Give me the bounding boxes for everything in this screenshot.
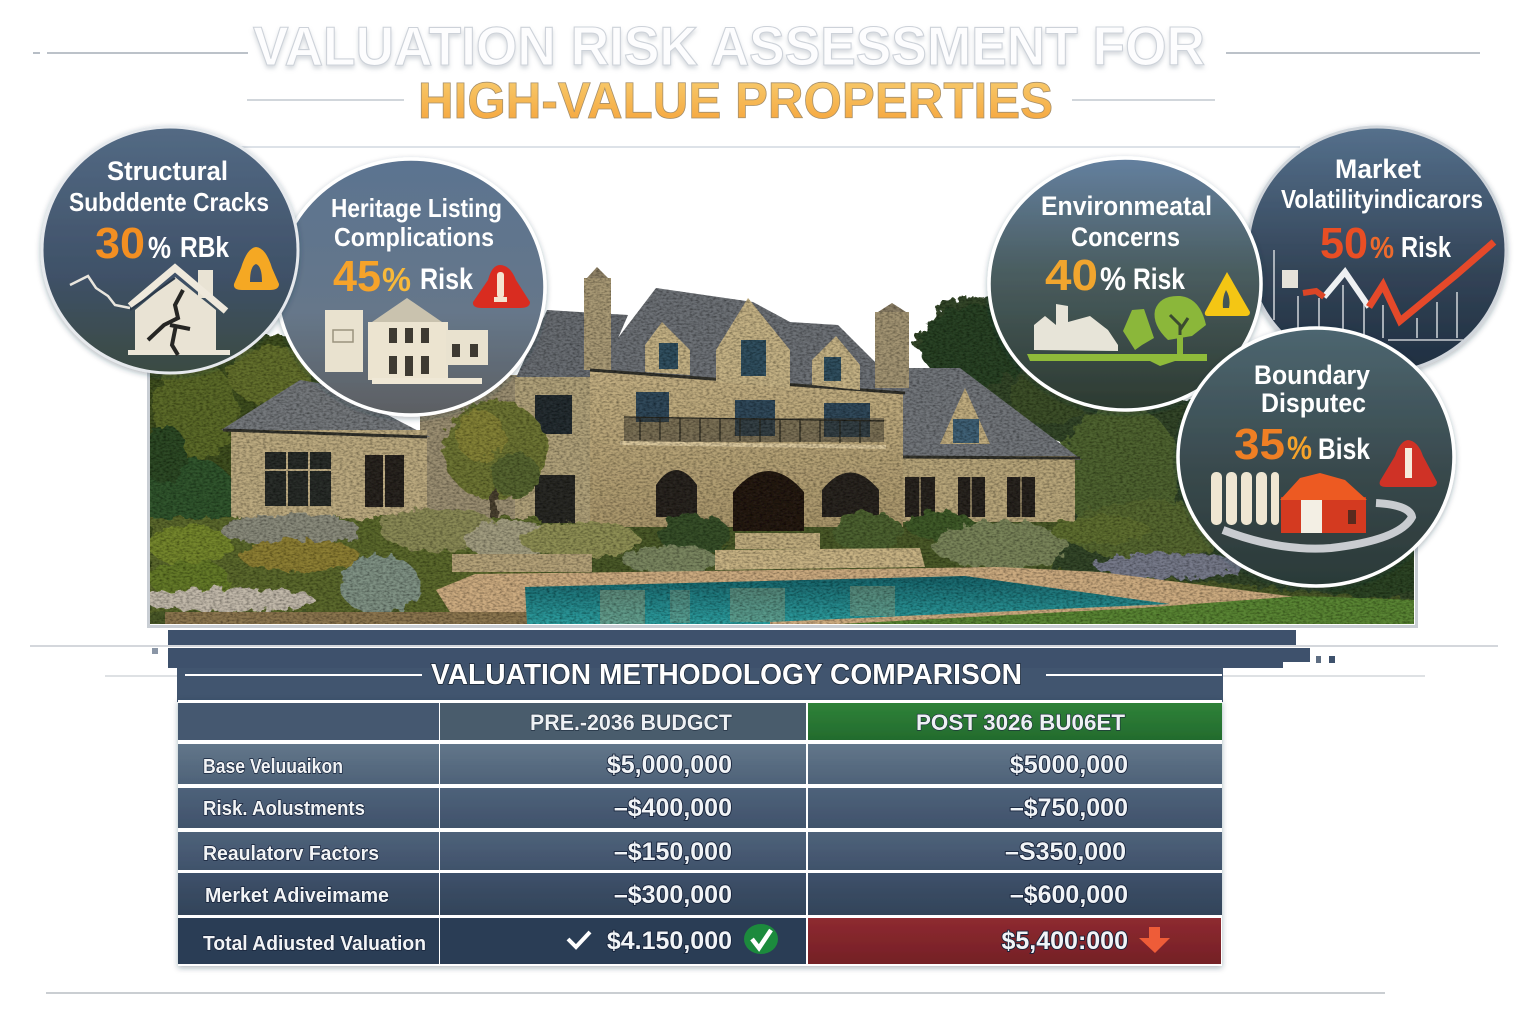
icon: down arrow: [1139, 927, 1170, 953]
row: market adjustment: –$600,000: [1010, 881, 1128, 909]
risk value: Risk: [420, 263, 473, 296]
header row: POST 3026 BU06ET: [916, 710, 1126, 735]
row: base valuation: $5000,000: [1010, 751, 1128, 779]
risk value: Risk: [1401, 232, 1452, 264]
terrace: [436, 567, 1292, 624]
icon: check mark: [568, 932, 590, 947]
garden: [145, 508, 1245, 615]
label: [69, 156, 269, 217]
label: Market: [1335, 154, 1421, 184]
icon: heritage buildings: [325, 298, 488, 384]
row: total adjusted valuation: $4.150,000: [607, 927, 732, 955]
risk value: %: [1100, 261, 1126, 297]
label: Volatilityindicarors: [1281, 184, 1483, 214]
row: risk adjustments: Risk. Aolustments: [203, 798, 365, 820]
badge: heritage listing: [277, 159, 545, 415]
risk value: 40: [1045, 251, 1098, 300]
risk value: [333, 252, 473, 301]
risk value: 45: [333, 252, 381, 301]
table heading: VALUATION METHODOLOGY COMPARISON: [431, 659, 1022, 691]
row: regulatory factors: –$150,000: [614, 838, 732, 866]
main facade: [515, 298, 905, 531]
icon: fence: [1211, 472, 1279, 525]
icon: house and arrow: [1223, 473, 1412, 549]
left wing: [221, 375, 525, 522]
row: base valuation: $5,000,000: [607, 751, 732, 779]
pool: [525, 576, 1170, 624]
risk value: [95, 219, 230, 268]
row: regulatory factors: –S350,000: [1005, 838, 1126, 866]
risk value: Risk: [1133, 263, 1185, 296]
row: base valuation: [178, 744, 1222, 784]
risk value: 30: [95, 219, 145, 268]
row: market adjustment: –$300,000: [614, 881, 732, 909]
label: [1281, 154, 1483, 214]
title line 1: VALUATION RISK ASSESSMENT FOR: [253, 15, 1205, 77]
row: market adjustment: Merket Adiveimame: [205, 885, 389, 907]
right wing: [895, 368, 1082, 522]
header row: [178, 703, 1222, 740]
label: [1254, 360, 1370, 418]
risk value: [1045, 251, 1185, 300]
row: regulatory factors: Reaulatorv Factors: [203, 843, 379, 865]
lawn: [840, 596, 1415, 624]
row: base valuation: Base Veluuaikon: [203, 756, 343, 778]
label: Structural: [107, 156, 228, 186]
icon: red warning: [473, 265, 530, 308]
badge: market volatility: [1248, 127, 1506, 373]
photo: mansion with garden and pool: [140, 147, 1430, 628]
row: total adjusted valuation: Total Adiusted Valuation: [203, 933, 426, 955]
label: Heritage Listing: [331, 193, 502, 223]
bottom rule: [46, 992, 1385, 994]
row: risk adjustments: –$750,000: [1010, 794, 1128, 822]
risk value: Bisk: [1318, 433, 1370, 466]
comparison table: [178, 700, 1222, 966]
label: Complications: [334, 222, 494, 252]
steps: [452, 533, 925, 572]
row: total adjusted valuation: [178, 918, 1221, 964]
label: Environmeatal: [1041, 191, 1212, 221]
trees right: [912, 295, 1430, 600]
risk value: 35: [1234, 420, 1285, 469]
icon: amber warning: [234, 247, 279, 290]
risk value: %: [382, 261, 411, 298]
row: risk adjustments: [178, 788, 1222, 828]
icon: factory and trees: [1027, 296, 1207, 366]
risk value: 50: [1320, 219, 1368, 268]
label: Subddente Cracks: [69, 187, 269, 217]
icon: red warning: [1380, 440, 1437, 487]
risk value: [1320, 219, 1452, 268]
row: regulatory factors: [178, 832, 1222, 870]
row: total adjusted valuation: $5,400:000: [1001, 927, 1128, 955]
ground base: [150, 522, 1414, 624]
row: risk adjustments: –$400,000: [614, 794, 732, 822]
icon: yellow warning: [1205, 272, 1250, 316]
risk value: RBk: [180, 232, 230, 264]
title: [33, 15, 1480, 129]
badge: boundary disputes: [1178, 328, 1454, 586]
icon: cracked house: [70, 268, 230, 355]
header row: PRE.-2036 BUDGCT: [530, 710, 733, 735]
chart: volatility line: [1274, 242, 1494, 340]
badge: structural subsidence cracks: [42, 127, 298, 373]
risk value: %: [1370, 230, 1394, 265]
table title bands: [30, 630, 1498, 702]
risk value: %: [148, 230, 171, 265]
icon: green check badge: [744, 924, 778, 954]
main roof and chimneys: [515, 267, 909, 394]
title line 2: HIGH-VALUE PROPERTIES: [418, 72, 1053, 129]
label: [331, 193, 502, 252]
lower left path: [165, 612, 530, 624]
row: market adjustment: [178, 873, 1222, 915]
label: [1041, 191, 1212, 252]
risk value: [1234, 420, 1370, 469]
badge: environmental concerns: [989, 158, 1261, 410]
tree in front of facade: [443, 400, 547, 535]
trees left: [150, 334, 320, 568]
label: Boundary: [1254, 360, 1370, 390]
risk value: %: [1287, 430, 1312, 466]
label: Concerns: [1071, 222, 1180, 252]
label: Disputec: [1261, 388, 1366, 418]
